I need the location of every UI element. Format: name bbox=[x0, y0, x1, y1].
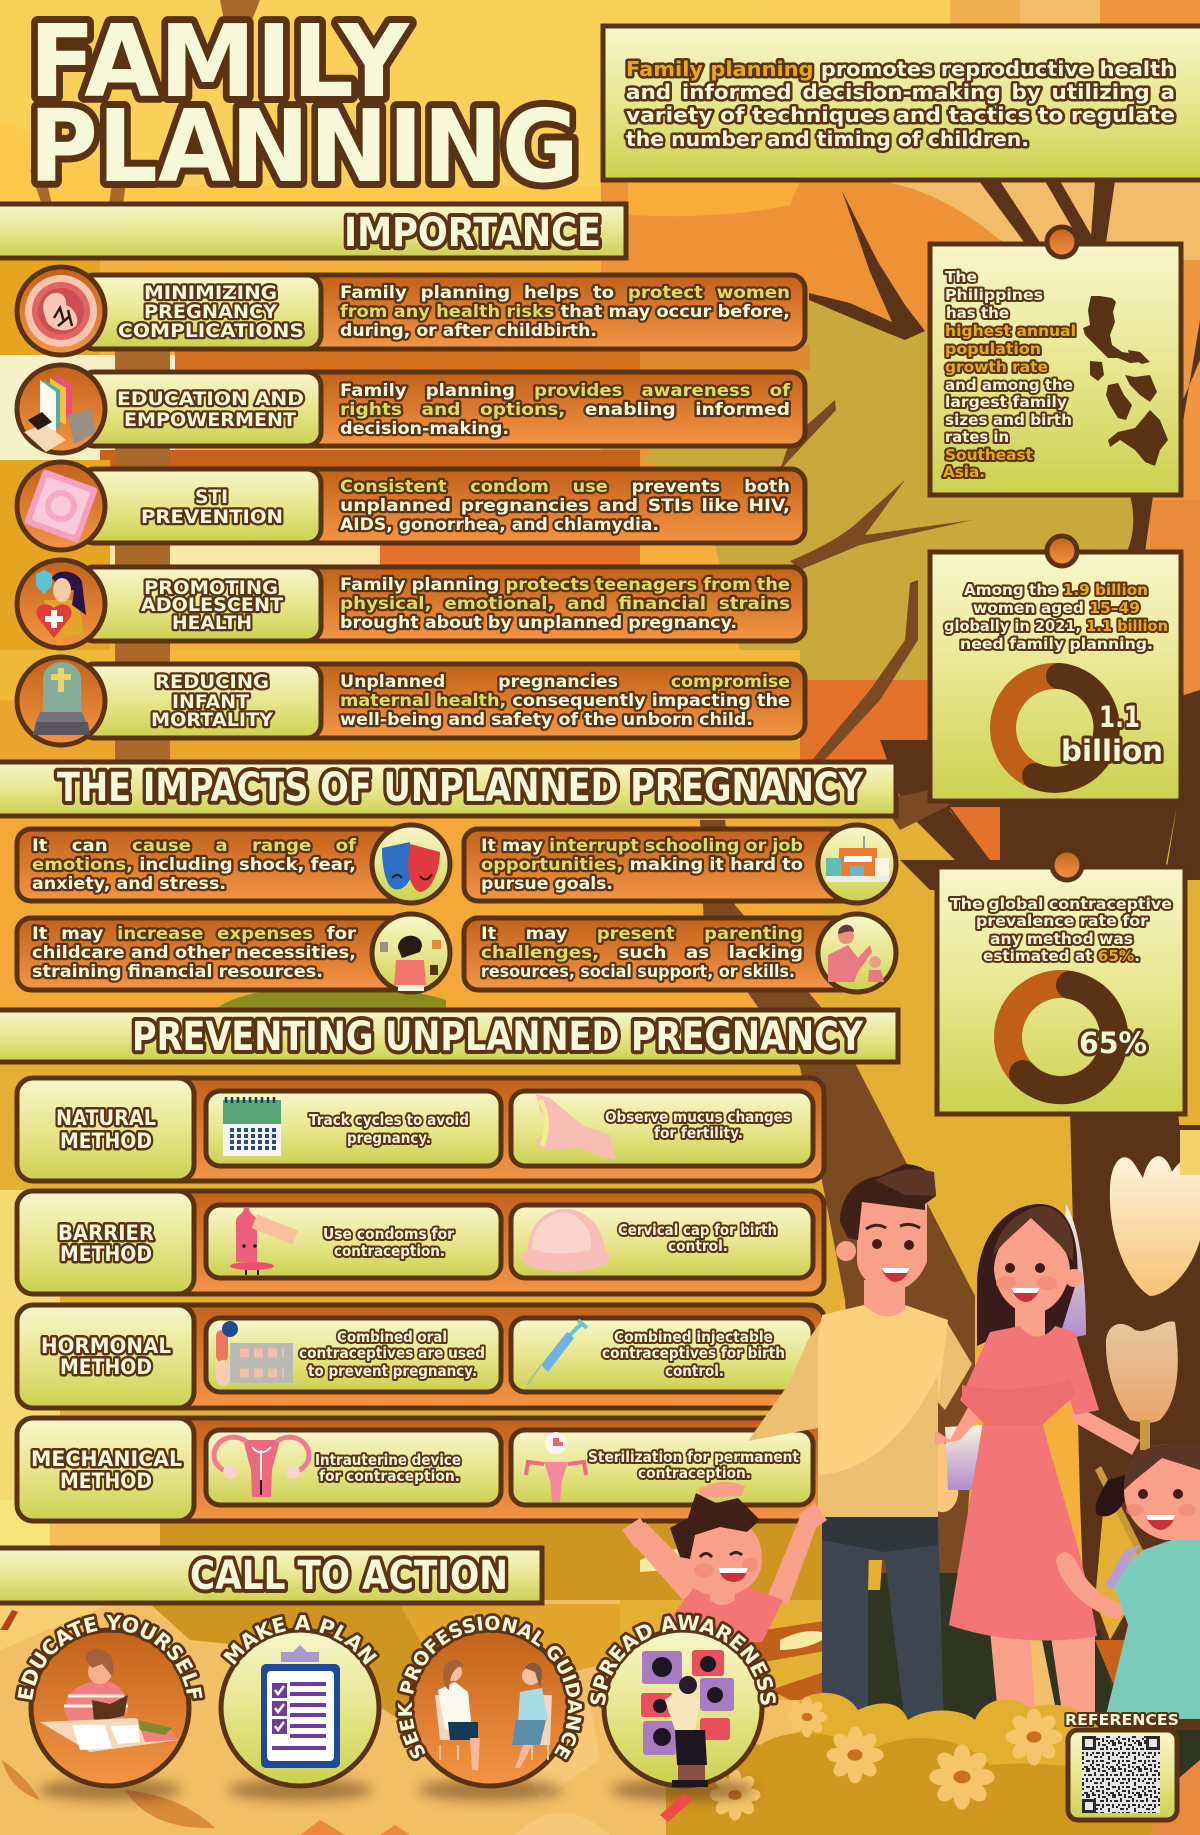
intro panel: Family planning promotes reproductive health bbox=[626, 57, 1175, 81]
side panel: Philippines fact: population bbox=[945, 340, 1041, 358]
heading banner: call to action bbox=[0, 1548, 542, 1603]
donut chart: 65% bbox=[1008, 984, 1147, 1090]
side panel: Philippines fact: sizes and birth bbox=[945, 411, 1072, 429]
importance row: reducing infant mortality: well-being and safety of the unborn child. bbox=[340, 710, 753, 730]
icon: syringe bbox=[527, 1320, 587, 1385]
side panel: contraceptive prevalence: any method was bbox=[990, 930, 1133, 948]
importance row: promoting adolescent health: PROMOTING bbox=[144, 577, 278, 599]
method row: mechanical: MECHANICAL bbox=[31, 1447, 182, 1471]
card: cervical cap bbox=[511, 1205, 813, 1278]
side panel: Philippines fact: The bbox=[945, 268, 977, 286]
method row: natural bbox=[17, 1078, 824, 1181]
intro panel: and informed decision-making by utilizing a bbox=[626, 80, 1175, 104]
heading banner: importance: IMPORTANCE bbox=[344, 210, 601, 256]
card: observe mucus: Observe mucus changes bbox=[605, 1108, 791, 1126]
icon: cervical cap dome bbox=[522, 1209, 610, 1272]
pin bbox=[1047, 536, 1077, 566]
call to action: educate yourself: EDUCATE YOURSELF bbox=[14, 1612, 206, 1702]
bushes with flowers bbox=[666, 1693, 1200, 1835]
method row: natural: NATURAL bbox=[56, 1106, 156, 1130]
illustration: family bbox=[622, 1164, 1200, 1725]
impact card: parenting bbox=[464, 914, 896, 992]
card: track cycles: Track cycles to avoid bbox=[309, 1111, 469, 1129]
impact card: expenses bbox=[17, 914, 450, 992]
icon: stressed woman with bills bbox=[372, 914, 450, 992]
side panel: Philippines fact bbox=[930, 227, 1181, 495]
tulips bbox=[1095, 1130, 1200, 1570]
call to action: make a plan bbox=[218, 1612, 382, 1808]
importance row: minimizing pregnancy complications: MINIMIZING bbox=[144, 282, 277, 304]
curved label bbox=[32, 1630, 188, 1786]
side panel: 1.9 billion women: Among the 1.9 billion bbox=[964, 581, 1148, 599]
icon: theatre masks bbox=[372, 825, 450, 903]
side panel: Philippines fact: Asia. bbox=[943, 463, 985, 481]
card: condoms: Use condoms for bbox=[323, 1225, 455, 1243]
importance row: STI prevention: unplanned pregnancies and STIs like HIV, bbox=[340, 496, 790, 516]
card: track cycles bbox=[206, 1091, 501, 1166]
importance row: reducing infant mortality bbox=[17, 657, 805, 745]
icon: condom packet bbox=[17, 462, 105, 550]
method row: hormonal bbox=[17, 1305, 824, 1408]
side panel: Philippines fact: largest family bbox=[945, 393, 1067, 411]
importance row: reducing infant mortality: Unplanned pregnancies compromise bbox=[340, 672, 790, 692]
importance row: STI prevention: AIDS, gonorrhea, and chlamydia. bbox=[340, 515, 659, 535]
card: injectable contraceptives bbox=[511, 1318, 813, 1392]
importance row: STI prevention: Consistent condom use prevents both bbox=[340, 477, 790, 497]
icon: woman reading at desk bbox=[40, 1649, 178, 1752]
icon: school building bbox=[818, 825, 896, 903]
side panel: contraceptive prevalence bbox=[937, 850, 1185, 1114]
boy bbox=[622, 1493, 827, 1644]
pin bbox=[1047, 227, 1077, 257]
icon: books and graduation cap bbox=[17, 365, 105, 453]
card: oral contraceptives bbox=[206, 1318, 501, 1392]
side panel: Philippines fact: rates in bbox=[945, 428, 1009, 446]
side panel: Philippines fact: has the bbox=[946, 304, 1009, 322]
card: intrauterine device: for contraception. bbox=[319, 1467, 460, 1485]
call to action: make a plan: MAKE A PLAN bbox=[220, 1612, 380, 1668]
call to action: spread awareness bbox=[588, 1612, 778, 1822]
importance row: STI prevention bbox=[17, 462, 805, 550]
importance row: reducing infant mortality: MORTALITY bbox=[151, 709, 273, 731]
curved label bbox=[605, 1630, 761, 1786]
importance row: promoting adolescent health: physical, emotional, and financial strains bbox=[340, 594, 790, 614]
importance row: promoting adolescent health bbox=[17, 560, 805, 648]
card: condoms bbox=[206, 1205, 501, 1278]
card: oral contraceptives: to prevent pregnancy. bbox=[308, 1362, 477, 1380]
card: oral contraceptives: contraceptives are used bbox=[299, 1344, 485, 1362]
heading banner: the impacts of unplanned pregnancy: THE IMPACTS OF UNPLANNED PREGNANCY bbox=[57, 765, 864, 811]
side panel: contraceptive prevalence: prevalence rate for bbox=[976, 912, 1149, 930]
impact card: parenting: It may present parenting bbox=[481, 924, 803, 944]
side panel: 1.9 billion women bbox=[930, 536, 1181, 801]
icon: condom character bbox=[230, 1208, 298, 1275]
importance row: education and empowerment bbox=[17, 365, 805, 453]
importance row: education and empowerment: EDUCATION AND bbox=[117, 388, 304, 410]
impact card: expenses: childcare and other necessities, bbox=[32, 943, 356, 963]
side panel: Philippines fact: growth rate bbox=[945, 358, 1048, 376]
heading banner: preventing unplanned pregnancy bbox=[0, 1010, 898, 1062]
title bbox=[29, 3, 579, 205]
impact card: schooling and job: It may interrupt schooling or job bbox=[481, 836, 803, 856]
heading banner: call to action: CALL TO ACTION bbox=[190, 1553, 508, 1599]
icon: fetus in womb bbox=[17, 267, 105, 355]
impact card: emotions bbox=[17, 825, 450, 903]
side panel: contraceptive prevalence: estimated at 65%. bbox=[983, 947, 1140, 965]
girl bbox=[1096, 1444, 1200, 1719]
card: sterilization bbox=[511, 1430, 813, 1505]
card: injectable contraceptives: Combined injectable bbox=[614, 1328, 773, 1346]
card: injectable contraceptives: contraceptives for birth bbox=[602, 1344, 785, 1362]
side panel: Philippines fact: highest annual bbox=[945, 322, 1076, 340]
importance row: promoting adolescent health: ADOLESCENT bbox=[141, 594, 283, 616]
intro panel: the number and timing of children. bbox=[626, 127, 1029, 151]
heading banner: importance bbox=[0, 204, 626, 258]
references QR block: REFERENCES bbox=[1065, 1711, 1179, 1729]
importance row: education and empowerment: decision-making. bbox=[340, 419, 509, 439]
importance row: education and empowerment: rights and options, enabling informed bbox=[340, 400, 790, 420]
importance row: promoting adolescent health: brought about by unplanned pregnancy. bbox=[340, 613, 737, 633]
method row: natural: METHOD bbox=[60, 1129, 152, 1153]
impact card: parenting: resources, social support, or skills. bbox=[481, 962, 795, 982]
method row: barrier bbox=[17, 1191, 824, 1294]
card: injectable contraceptives: control. bbox=[665, 1362, 724, 1380]
icon: mother and child bbox=[818, 914, 896, 992]
card: intrauterine device: Intrauterine device bbox=[315, 1451, 461, 1469]
card: observe mucus bbox=[511, 1091, 813, 1166]
icon: map of the Philippines bbox=[1083, 296, 1168, 466]
impact card: schooling and job: pursue goals. bbox=[481, 874, 613, 894]
importance row: reducing infant mortality: INFANT bbox=[172, 691, 249, 713]
importance row: promoting adolescent health: Family planning protects teenagers from the bbox=[340, 575, 790, 595]
call to action: seek professional guidance: SEEK PROFESSIONAL GUIDANCE bbox=[395, 1613, 585, 1762]
icon: person among social cards bbox=[641, 1650, 734, 1787]
mother bbox=[935, 1204, 1140, 1715]
method row: mechanical: METHOD bbox=[60, 1469, 152, 1493]
icon: two women consulting bbox=[435, 1660, 552, 1770]
tree trunks and branches bbox=[700, 181, 1200, 1760]
impact card: emotions: It can cause a range of bbox=[32, 836, 357, 856]
call to action: educate yourself bbox=[14, 1612, 206, 1808]
references QR block bbox=[1065, 1711, 1179, 1820]
icon: uterus with IUD bbox=[214, 1437, 309, 1497]
icon: tombstone bbox=[17, 657, 105, 745]
importance row: minimizing pregnancy complications: during, or after childbirth. bbox=[340, 321, 597, 341]
impact card: emotions: emotions, including shock, fear, bbox=[32, 855, 356, 875]
importance row: minimizing pregnancy complications bbox=[17, 267, 805, 355]
title: FAMILY bbox=[29, 3, 411, 120]
impact card: schooling and job bbox=[464, 825, 896, 903]
heading banner: preventing unplanned pregnancy: PREVENTING UNPLANNED PREGNANCY bbox=[132, 1014, 864, 1060]
impact card: parenting: challenges, such as lacking bbox=[481, 943, 803, 963]
method row: barrier: BARRIER bbox=[58, 1221, 154, 1245]
donut chart: 1.1 billion: 1.1 bbox=[1099, 700, 1140, 734]
curved label bbox=[412, 1630, 568, 1786]
impact card: emotions: anxiety, and stress. bbox=[32, 874, 226, 894]
impact card: schooling and job: opportunities, making it hard to bbox=[481, 855, 803, 875]
card: cervical cap: control. bbox=[668, 1237, 728, 1255]
side panel: Philippines fact: Southeast bbox=[945, 446, 1033, 464]
icon: teen with heart and shield bbox=[17, 560, 105, 648]
card: cervical cap: Cervical cap for birth bbox=[618, 1221, 777, 1239]
call to action: spread awareness: SPREAD AWARENESS bbox=[588, 1612, 778, 1708]
side panel: Philippines fact: Philippines bbox=[945, 286, 1043, 304]
icon: clipboard checklist bbox=[261, 1645, 340, 1768]
intro panel: variety of techniques and tactics to regulate bbox=[626, 103, 1175, 127]
card: sterilization: Sterilization for permanent bbox=[588, 1448, 799, 1466]
side panel: 1.9 billion women: globally in 2021, 1.1 billion bbox=[944, 617, 1168, 635]
card: oral contraceptives: Combined oral bbox=[337, 1328, 447, 1346]
curved label bbox=[222, 1630, 378, 1786]
importance row: minimizing pregnancy complications: from any health risks that may occur before, bbox=[340, 302, 790, 322]
side panel: 1.9 billion women: need family planning. bbox=[960, 635, 1153, 653]
card: observe mucus: for fertility. bbox=[654, 1124, 743, 1142]
icon: sterilization uterus bbox=[526, 1432, 586, 1502]
importance row: minimizing pregnancy complications: COMPLICATIONS bbox=[118, 320, 304, 342]
donut chart: 1.1 billion bbox=[1003, 676, 1163, 780]
icon: calendar bbox=[223, 1097, 281, 1156]
card: sterilization: contraception. bbox=[638, 1464, 751, 1482]
method row: hormonal: HORMONAL bbox=[41, 1334, 171, 1358]
importance row: STI prevention: STI bbox=[195, 486, 228, 508]
importance row: minimizing pregnancy complications: Family planning helps to protect women bbox=[340, 283, 790, 303]
side panel: Philippines fact: and among the bbox=[945, 376, 1073, 394]
importance row: STI prevention: PREVENTION bbox=[141, 506, 283, 528]
donut chart: 1.1 billion: billion bbox=[1061, 734, 1163, 768]
method row: hormonal: METHOD bbox=[60, 1355, 152, 1379]
importance row: education and empowerment: Family planning provides awareness of bbox=[340, 381, 791, 401]
pin bbox=[1052, 850, 1082, 880]
impact card: expenses: straining financial resources. bbox=[32, 962, 323, 982]
QR code bbox=[1082, 1736, 1160, 1813]
importance row: reducing infant mortality: REDUCING bbox=[155, 671, 269, 693]
icon: pill blister bbox=[216, 1321, 293, 1386]
side panel: 1.9 billion women: women aged 15–49 bbox=[973, 599, 1140, 617]
importance row: reducing infant mortality: maternal health, consequently impacting the bbox=[340, 691, 790, 711]
title: PLANNING bbox=[29, 88, 579, 205]
card: track cycles: pregnancy. bbox=[347, 1129, 431, 1147]
donut chart: 65%: 65% bbox=[1079, 1026, 1147, 1060]
importance row: minimizing pregnancy complications: PREGNANCY bbox=[144, 301, 277, 323]
card: condoms: contraception. bbox=[334, 1242, 445, 1260]
father bbox=[698, 1164, 972, 1725]
icon: fingers with mucus bbox=[536, 1094, 616, 1160]
importance row: education and empowerment: EMPOWERMENT bbox=[124, 409, 296, 431]
side panel: contraceptive prevalence: The global contraceptive bbox=[950, 895, 1172, 913]
card: intrauterine device bbox=[206, 1430, 501, 1505]
intro panel bbox=[603, 26, 1200, 180]
method row: mechanical bbox=[17, 1418, 824, 1521]
method row: barrier: METHOD bbox=[60, 1242, 152, 1266]
impact card: expenses: It may increase expenses for bbox=[32, 924, 357, 944]
importance row: promoting adolescent health: HEALTH bbox=[172, 612, 252, 634]
